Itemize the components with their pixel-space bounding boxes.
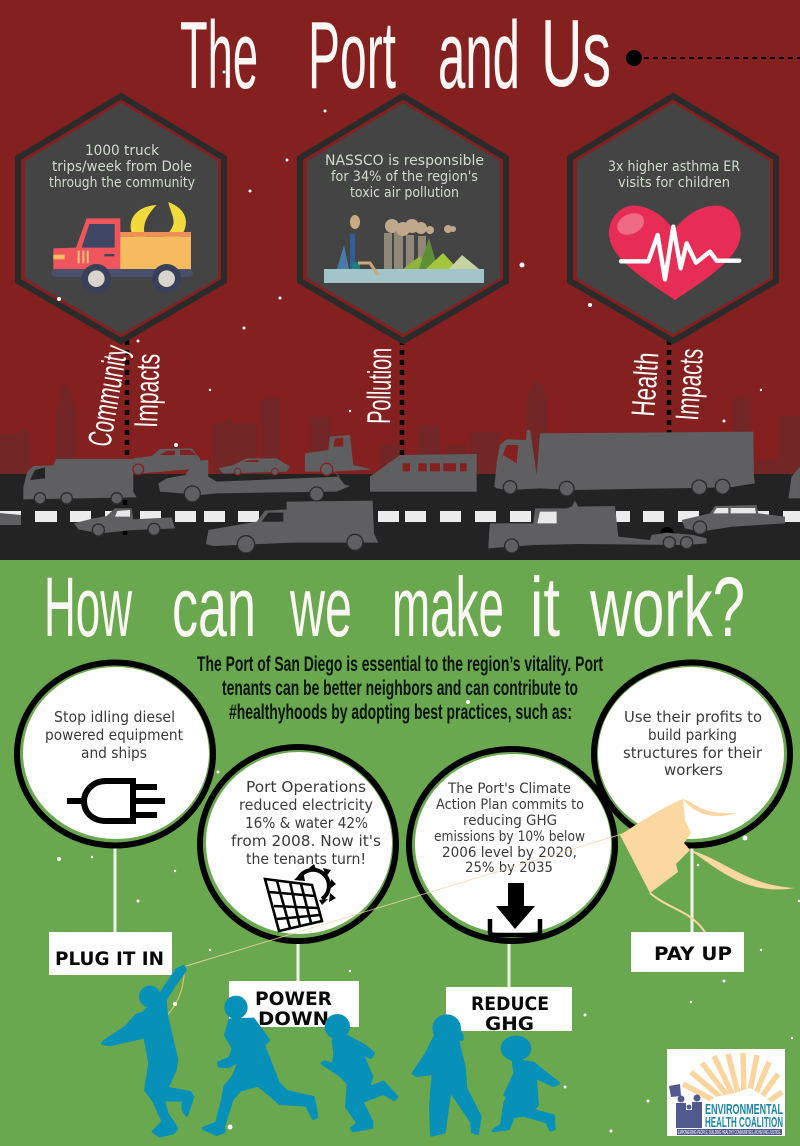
label: plug it in: PLUG IT IN xyxy=(55,948,164,970)
title: The Port and Us xyxy=(180,0,611,109)
circle text: Use their profits to xyxy=(624,708,762,726)
connector stems xyxy=(115,846,692,988)
panel: circle reduce GHG xyxy=(406,746,618,944)
hexagon text: truck trips xyxy=(49,143,195,191)
circle text: workers xyxy=(664,761,723,779)
semi truck xyxy=(494,430,755,490)
dotted connector from title xyxy=(626,50,800,66)
child 2 running xyxy=(203,997,317,1134)
lower box truck xyxy=(206,501,378,546)
label: plug it in xyxy=(49,932,172,975)
label: reduce GHG: REDUCE xyxy=(471,993,549,1015)
intro paragraph: tenants can be better neighbors and can contribute to xyxy=(222,677,578,700)
windows xyxy=(30,467,45,480)
lower pickup xyxy=(74,508,175,533)
edge car right xyxy=(788,467,800,498)
title: The Port and Us: Us xyxy=(541,0,611,107)
child 1 flying kite xyxy=(103,967,193,1136)
road lane dashes xyxy=(0,511,800,522)
icon: polluted landscape xyxy=(324,215,484,283)
panel: green lower section background xyxy=(0,560,800,1146)
panel: circle power down xyxy=(197,744,399,944)
road xyxy=(0,474,800,560)
heading: How can we make it work? xyxy=(44,560,745,654)
panel: hexagon community impacts xyxy=(18,96,224,341)
bus xyxy=(370,454,477,492)
skyline silhouette xyxy=(0,382,800,474)
intro paragraph xyxy=(197,653,603,724)
heading: How can we make it work?: make xyxy=(392,560,504,654)
intro paragraph: #healthyhoods by adopting best practices, such as: xyxy=(229,701,572,724)
vertical label: Community Impacts: Impacts xyxy=(127,353,167,428)
label: pay up xyxy=(631,932,744,972)
hexagon text: truck trips: 1000 truck xyxy=(85,143,160,159)
icon: solar panel and sun xyxy=(265,864,336,931)
circle text xyxy=(434,781,585,876)
vertical label: Health Impacts xyxy=(624,347,710,421)
circle text: 16% & water 42% xyxy=(245,814,368,832)
circle text: Stop idling diesel xyxy=(54,708,175,726)
panel: circle pay up xyxy=(591,660,793,848)
label: power down xyxy=(229,981,359,1030)
left half vehicles xyxy=(23,435,378,553)
sedan xyxy=(218,458,290,473)
intro paragraph: The Port of San Diego is essential to the region’s vitality. Port xyxy=(197,653,603,676)
tow truck xyxy=(158,460,350,495)
circle text: emissions by 10% below xyxy=(434,829,585,845)
child 3 running xyxy=(322,1016,397,1131)
circle text: powered equipment xyxy=(45,726,183,744)
logo wordmark xyxy=(705,1101,783,1131)
heading: How can we make it work?: can xyxy=(172,560,256,654)
heading: How can we make it work?: How xyxy=(44,560,132,654)
hexagon text: NASSCO xyxy=(325,153,484,201)
bus windows xyxy=(403,463,467,471)
traffic silhouettes xyxy=(0,430,800,553)
circle text: reduced electricity xyxy=(239,796,373,814)
circle text xyxy=(623,708,763,779)
children silhouettes xyxy=(103,967,558,1136)
label: pay up: PAY UP xyxy=(654,943,732,965)
child 4 walking xyxy=(413,1016,480,1135)
right half vehicles xyxy=(370,430,800,553)
circle text: Port Operations xyxy=(246,778,366,796)
panel: hexagon pollution xyxy=(300,96,506,341)
panel: red upper section background xyxy=(0,0,800,474)
circle text: and ships xyxy=(81,744,147,762)
lower sedan xyxy=(682,505,785,532)
label: power down: POWER xyxy=(255,988,332,1010)
vertical label: Health Impacts: Impacts xyxy=(668,347,710,421)
circle text: Action Plan commits to xyxy=(436,797,584,813)
icon: plug xyxy=(67,781,165,821)
heading: How can we make it work?: we xyxy=(289,560,352,654)
box truck xyxy=(23,459,137,499)
edge car left xyxy=(0,513,21,525)
circle text: structures for their xyxy=(623,744,763,762)
icon: truck with bananas xyxy=(51,202,193,293)
vertical label: Pollution: Pollution xyxy=(360,347,398,424)
dotted connector lines xyxy=(125,330,674,541)
circle text: from 2008. Now it's xyxy=(231,832,381,850)
title: The Port and Us: Port xyxy=(308,2,396,109)
icon: download arrow in tray xyxy=(490,883,540,935)
circle text: 2006 level by 2020, xyxy=(442,845,577,861)
vertical label: Community Impacts xyxy=(80,342,167,449)
title: The Port and Us: and xyxy=(438,2,520,109)
vertical label: Community Impacts: Community xyxy=(80,342,135,449)
hexagon text: NASSCO: NASSCO is responsible xyxy=(325,153,484,169)
icon: heart with heartbeat xyxy=(609,206,741,300)
label: reduce GHG: GHG xyxy=(485,1013,534,1035)
circle text: The Port's Climate xyxy=(447,781,571,797)
hexagon text: truck trips: through the community xyxy=(49,175,195,191)
circle text xyxy=(231,778,381,868)
label: reduce GHG xyxy=(446,987,572,1035)
flatbed cab xyxy=(305,435,372,472)
logo: Environmental Health Coalition xyxy=(667,1049,785,1136)
panel: hexagon health impacts xyxy=(570,96,776,341)
circle text: reducing GHG xyxy=(463,813,557,829)
panel: circle plug it in xyxy=(14,660,216,848)
kite with string and tails xyxy=(106,799,795,1045)
child 5 running xyxy=(493,1037,558,1131)
wagon xyxy=(133,448,201,474)
label: power down: DOWN xyxy=(258,1008,329,1030)
hexagon text: asthma: 3x higher asthma ER xyxy=(608,159,740,175)
circle text: 25% by 2035 xyxy=(465,860,553,876)
title: The Port and Us: The xyxy=(180,2,258,109)
hexagon text: asthma xyxy=(608,159,740,191)
hexagon text: truck trips: trips/week from Dole xyxy=(52,159,192,175)
circle text: the tenants turn! xyxy=(246,850,366,868)
hexagon text: asthma: visits for children xyxy=(618,175,730,191)
circle text xyxy=(45,708,183,762)
logo people xyxy=(669,1084,702,1128)
heading: How can we make it work?: it xyxy=(530,560,560,654)
circle text: build parking xyxy=(648,726,737,744)
hexagon text: NASSCO: for 34% of the region's xyxy=(331,169,478,185)
lower tow truck xyxy=(488,501,707,548)
hexagon text: NASSCO: toxic air pollution xyxy=(350,185,459,201)
vertical label: Health Impacts: Health xyxy=(624,351,665,417)
